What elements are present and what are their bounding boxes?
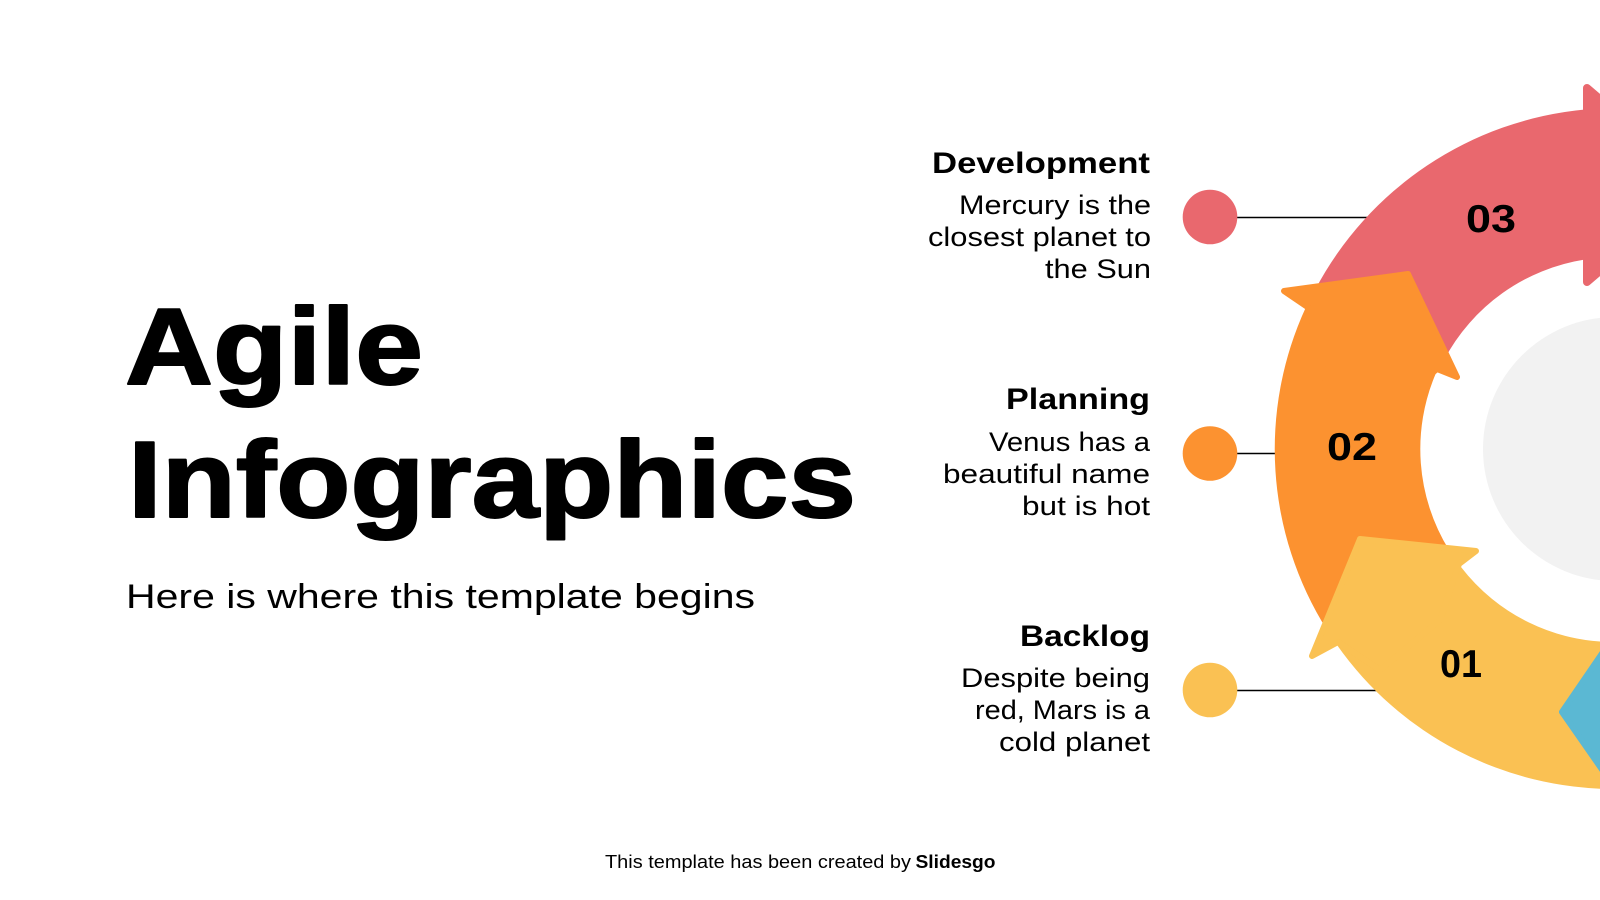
step: backlog: [961, 620, 1151, 757]
text: backlog description: red, Mars is a: [975, 695, 1150, 725]
text: backlog description: Despite being: [961, 663, 1150, 693]
number 02: 02: [1327, 426, 1377, 469]
connector: development: [1237, 216, 1368, 218]
number 01: 01: [1440, 643, 1482, 686]
text: planning description: Venus has a: [989, 427, 1150, 457]
text: planning description: beautiful name: [943, 459, 1150, 489]
text: development description: Mercury is the: [959, 190, 1151, 220]
text: backlog description: cold planet: [999, 727, 1151, 757]
marker: backlog: [1183, 663, 1237, 717]
subtitle: Here is where this template begins: [126, 578, 755, 616]
arrow: step 01: [1312, 539, 1600, 789]
number 03: 03: [1466, 198, 1516, 241]
step: planning: [943, 383, 1151, 521]
text: planning description: but is hot: [1022, 491, 1151, 521]
text: planning description: [943, 427, 1151, 521]
title: [125, 286, 856, 541]
heading: planning: Planning: [1006, 383, 1150, 416]
footer credit: This template has been created by: [605, 852, 911, 872]
text: backlog description: [961, 663, 1151, 757]
connector: backlog: [1237, 690, 1378, 692]
text: development description: [928, 190, 1151, 284]
marker: planning: [1183, 426, 1237, 481]
connector: planning: [1237, 452, 1276, 454]
arrow: step 02: [1275, 274, 1457, 630]
title: Agile: [125, 286, 423, 408]
title: Infographics: [128, 419, 856, 541]
marker: development: [1183, 190, 1237, 244]
step: development: [928, 147, 1151, 284]
heading: backlog: Backlog: [1020, 620, 1150, 653]
footer credit: Slidesgo: [916, 852, 996, 872]
text: development description: the Sun: [1045, 254, 1151, 284]
arrow: step 03: [1315, 88, 1600, 360]
heading: development: Development: [932, 147, 1150, 180]
centre circle: [1483, 317, 1600, 581]
text: development description: closest planet to: [928, 222, 1151, 252]
arrow: step 04 head: [1562, 598, 1600, 824]
